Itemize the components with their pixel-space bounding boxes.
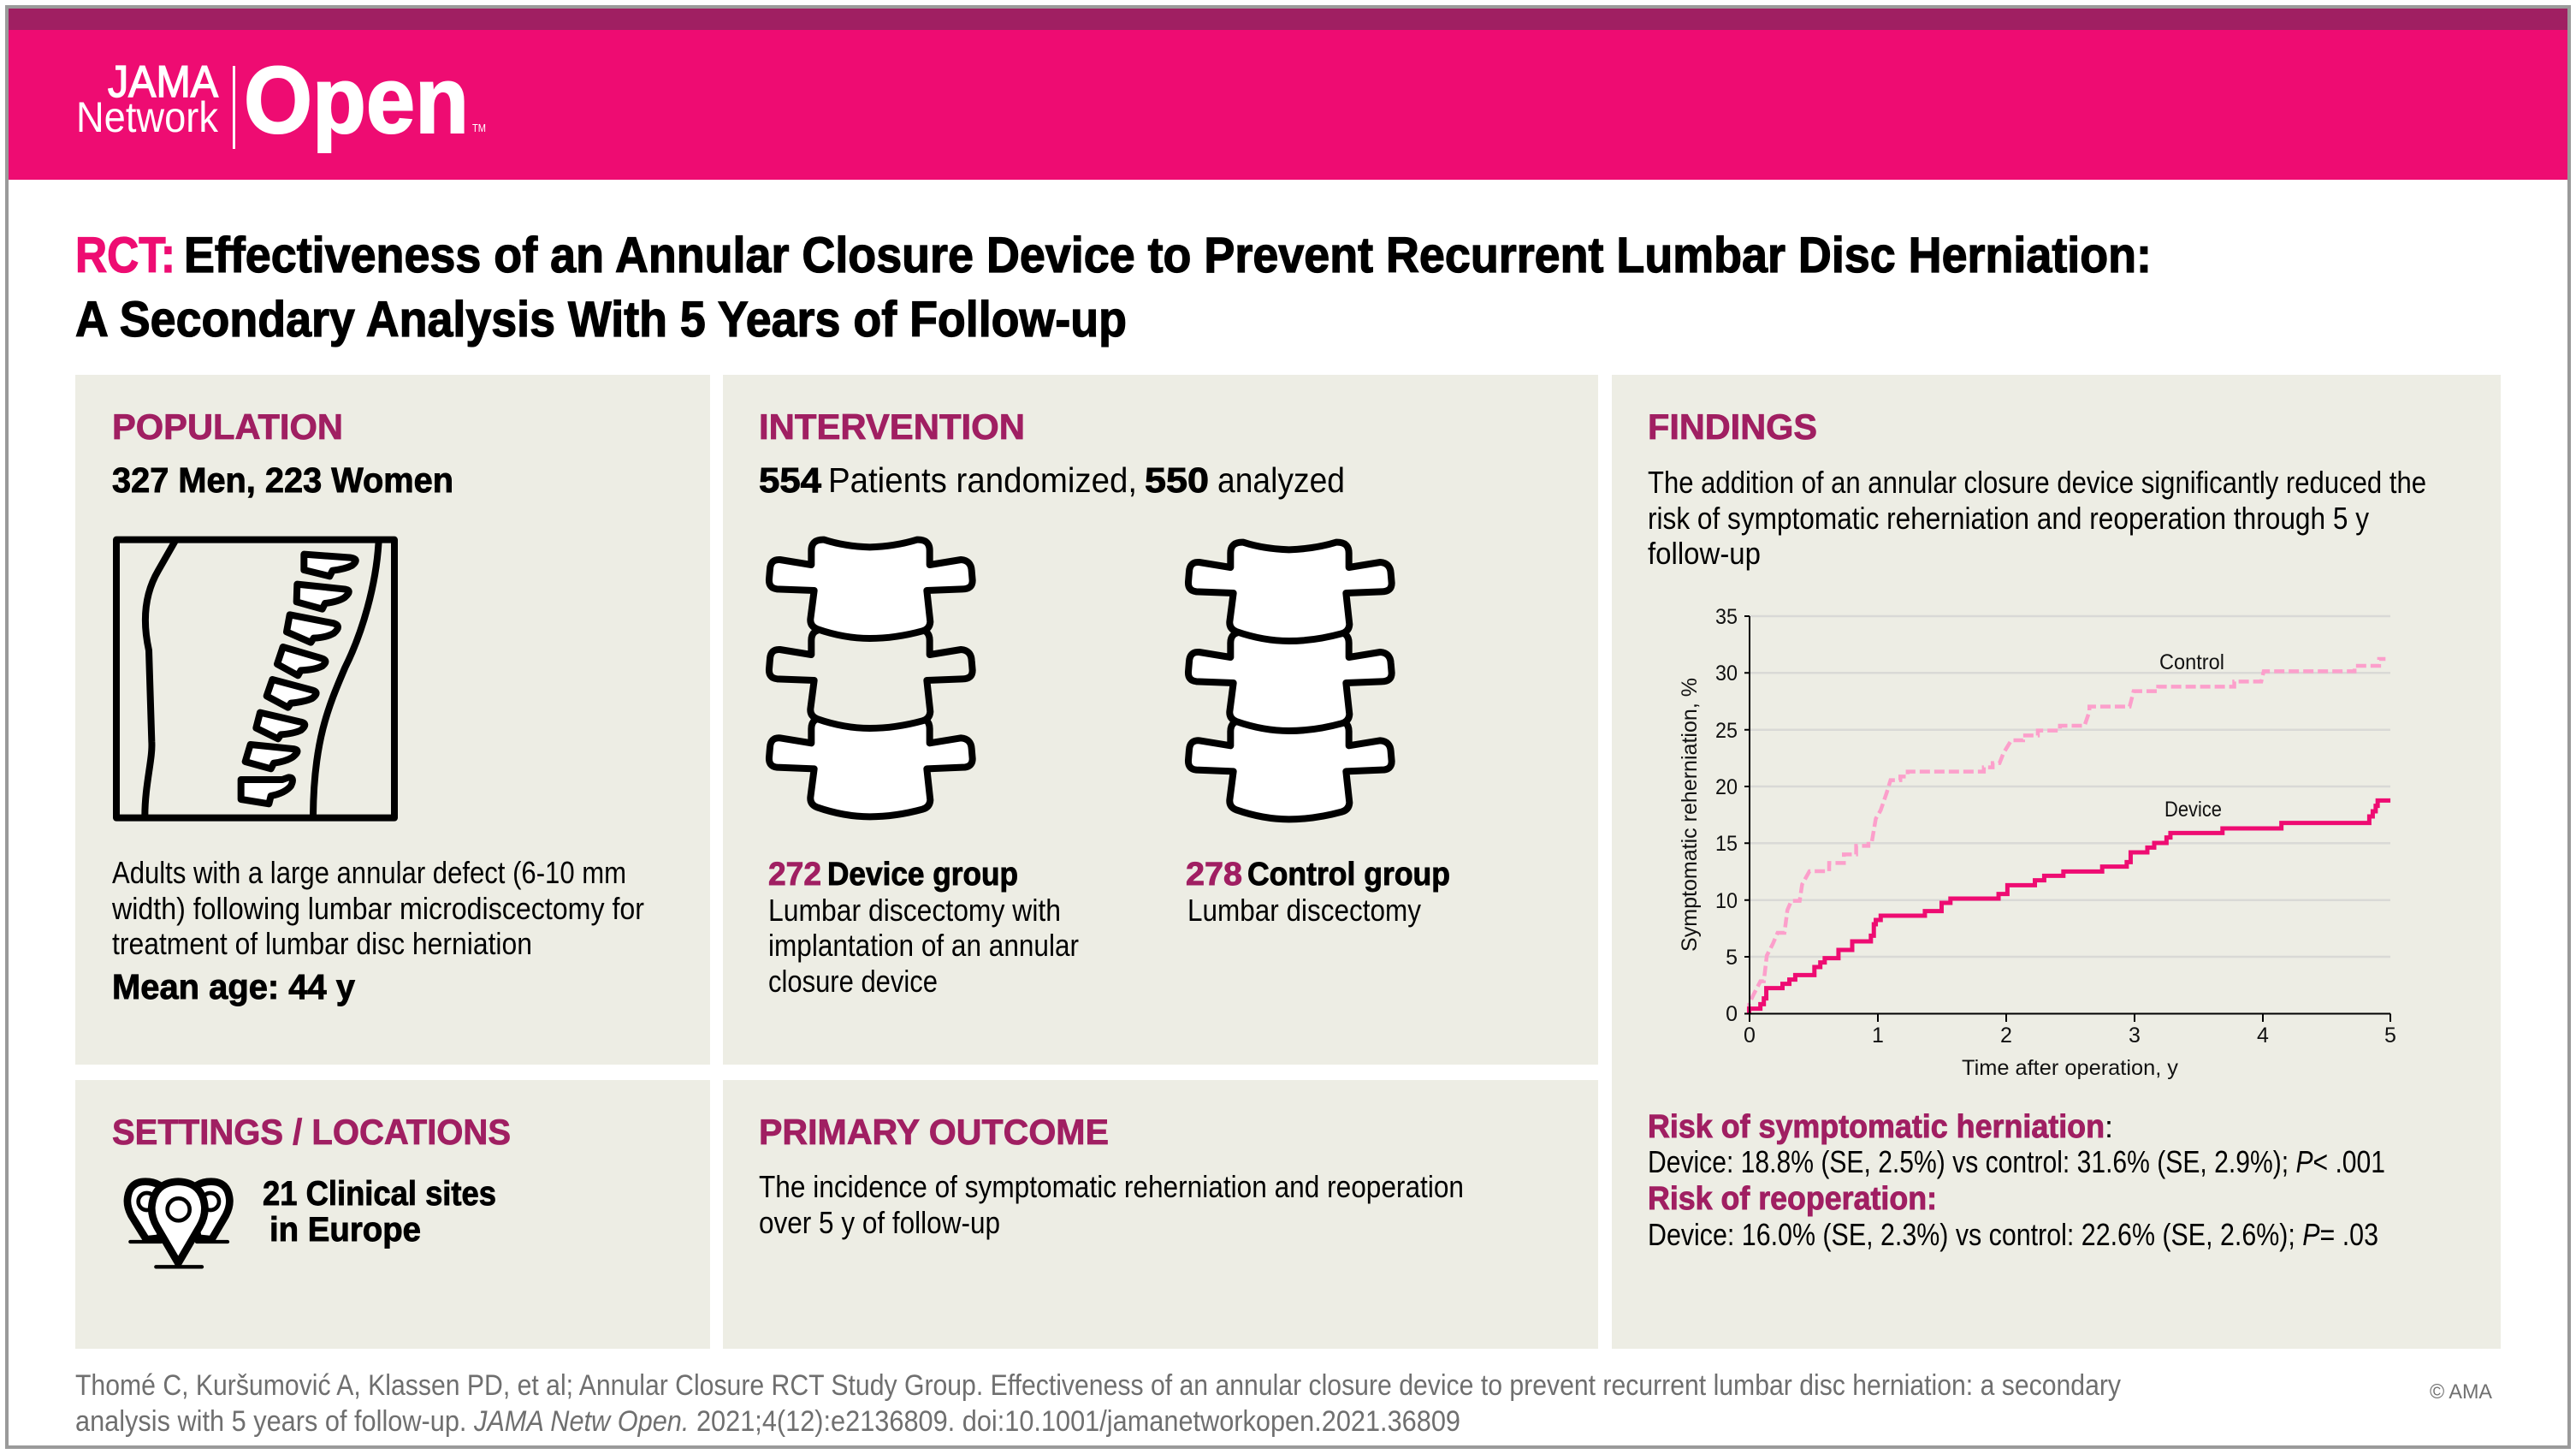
- title: RCT:: [75, 228, 175, 283]
- label: device: Device: [2164, 798, 2222, 822]
- panel: findings: [1612, 375, 2501, 1349]
- patients randomized and analyzed: 554: [759, 460, 821, 500]
- findings summary: follow-up: [1648, 536, 1761, 571]
- panel: settings / locations: [75, 1080, 710, 1349]
- icon: control group vertebrae: [1188, 543, 1392, 819]
- clinical sites text: 21 Clinical sites: [263, 1175, 496, 1213]
- icon: map pins: [127, 1182, 229, 1267]
- device group text: implantation of an annular: [768, 928, 1079, 963]
- citation: analysis with 5 years of follow-up. JAMA Netw Open. 2021;4(12):e2136809. doi:10.1001/jamanetworkopen.2021.36809: [75, 1405, 1460, 1438]
- findings summary: risk of symptomatic reherniation and reoperation through 5 y: [1648, 501, 2369, 536]
- heading: population: POPULATION: [112, 407, 343, 447]
- title: Effectiveness of an Annular Closure Device to Prevent Recurrent Lumbar Disc Herniation:: [184, 228, 2152, 283]
- population description: treatment of lumbar disc herniation: [112, 926, 532, 961]
- logo: JAMA Network Open: JAMA: [108, 57, 218, 107]
- panel: primary outcome: [723, 1080, 1598, 1349]
- risk results: Device: 16.0% (SE, 2.3%) vs control: 22.6% (SE, 2.6%); P= .03: [1648, 1217, 2378, 1252]
- citation: [75, 1369, 2121, 1438]
- heading: settings / locations: SETTINGS / LOCATIONS: [112, 1112, 511, 1152]
- label: control: Control: [2159, 650, 2224, 674]
- panel: intervention: [723, 375, 1598, 1065]
- chart: symptomatic reherniation over time: 4: [2257, 1024, 2269, 1047]
- clinical sites text: [263, 1175, 496, 1249]
- line: device: [1749, 800, 2390, 1013]
- header banner: [9, 9, 2567, 180]
- heading: intervention: INTERVENTION: [759, 407, 1025, 447]
- patients randomized and analyzed: analyzed: [1217, 460, 1345, 500]
- men and women counts: 327 Men, 223 Women: [112, 460, 453, 500]
- logo: JAMA Network Open: Open: [244, 48, 469, 153]
- risk results: Device: 18.8% (SE, 2.5%) vs control: 31.6% (SE, 2.9%); P< .001: [1648, 1144, 2385, 1179]
- population description: width) following lumbar microdiscectomy for: [111, 891, 644, 926]
- primary outcome text: [759, 1169, 1464, 1240]
- clinical sites text: in Europe: [269, 1211, 421, 1249]
- logo: JAMA Network Open: TM: [472, 122, 486, 134]
- patients randomized and analyzed: [759, 460, 1345, 500]
- chart: symptomatic reherniation over time: 30: [1715, 662, 1738, 685]
- findings summary: The addition of an annular closure device significantly reduced the: [1648, 465, 2426, 500]
- risk results: [1648, 1109, 2385, 1252]
- panel: population: [75, 375, 710, 1065]
- icon: device group vertebrae: [769, 540, 973, 816]
- line: control: [1749, 659, 2385, 1013]
- risk results: :: [2105, 1109, 2113, 1144]
- chart: symptomatic reherniation over time: 10: [1715, 889, 1738, 913]
- heading: findings: FINDINGS: [1648, 407, 1817, 447]
- copyright: © AMA: [2430, 1380, 2492, 1404]
- chart: symptomatic reherniation over time: 0: [1726, 1002, 1738, 1026]
- population description: Adults with a large annular defect (6-10 mm: [112, 855, 626, 890]
- chart: symptomatic reherniation over time: 3: [2129, 1024, 2141, 1047]
- chart: symptomatic reherniation over time: 2: [2000, 1024, 2012, 1047]
- control group text: Lumbar discectomy: [1187, 893, 1421, 928]
- risk results: Risk of reoperation:: [1648, 1181, 1937, 1217]
- device group text: Device group: [827, 857, 1018, 893]
- findings summary: [1648, 465, 2426, 571]
- title: [75, 228, 2152, 347]
- logo: JAMA Network Open: Network: [76, 93, 219, 141]
- chart: symptomatic reherniation over time: 25: [1715, 719, 1738, 743]
- chart: symptomatic reherniation over time: 20: [1715, 775, 1738, 799]
- chart: symptomatic reherniation over time: 0: [1744, 1024, 1756, 1047]
- population description: [111, 855, 644, 961]
- citation: Thomé C, Kuršumović A, Klassen PD, et al; Annular Closure RCT Study Group. Effectiveness of an annular closure device to prevent recurrent lumbar disc herniation: a secondary: [75, 1369, 2121, 1402]
- patients randomized and analyzed: Patients randomized,: [828, 460, 1137, 500]
- patients randomized and analyzed: 550: [1145, 460, 1209, 500]
- risk results: Risk of symptomatic herniation: [1648, 1109, 2105, 1145]
- chart: symptomatic reherniation over time: 15: [1715, 832, 1738, 856]
- control group text: [1186, 857, 1450, 928]
- device group text: 272: [768, 857, 821, 893]
- chart: symptomatic reherniation over time: [1678, 605, 2396, 1080]
- heading: primary outcome: PRIMARY OUTCOME: [759, 1112, 1109, 1152]
- device group text: [768, 857, 1079, 999]
- y axis title: Symptomatic reherniation, %: [1678, 678, 1702, 952]
- title: A Secondary Analysis With 5 Years of Follow-up: [75, 292, 1127, 347]
- chart: symptomatic reherniation over time: 1: [1872, 1024, 1884, 1047]
- device group text: Lumbar discectomy with: [768, 893, 1061, 928]
- primary outcome text: The incidence of symptomatic reherniation and reoperation: [759, 1169, 1464, 1204]
- control group text: Control group: [1247, 857, 1450, 893]
- control group text: 278: [1186, 857, 1242, 893]
- chart: symptomatic reherniation over time: 5: [2384, 1024, 2396, 1047]
- device group text: closure device: [768, 964, 938, 999]
- icon: spine in torso: [116, 540, 394, 818]
- primary outcome text: over 5 y of follow-up: [759, 1205, 1000, 1240]
- chart: symptomatic reherniation over time: 5: [1726, 946, 1738, 970]
- chart: symptomatic reherniation over time: 35: [1715, 605, 1738, 629]
- logo: JAMA Network Open: [76, 48, 486, 153]
- mean age: Mean age: 44 y: [112, 967, 355, 1006]
- x axis title: Time after operation, y: [1962, 1056, 2179, 1080]
